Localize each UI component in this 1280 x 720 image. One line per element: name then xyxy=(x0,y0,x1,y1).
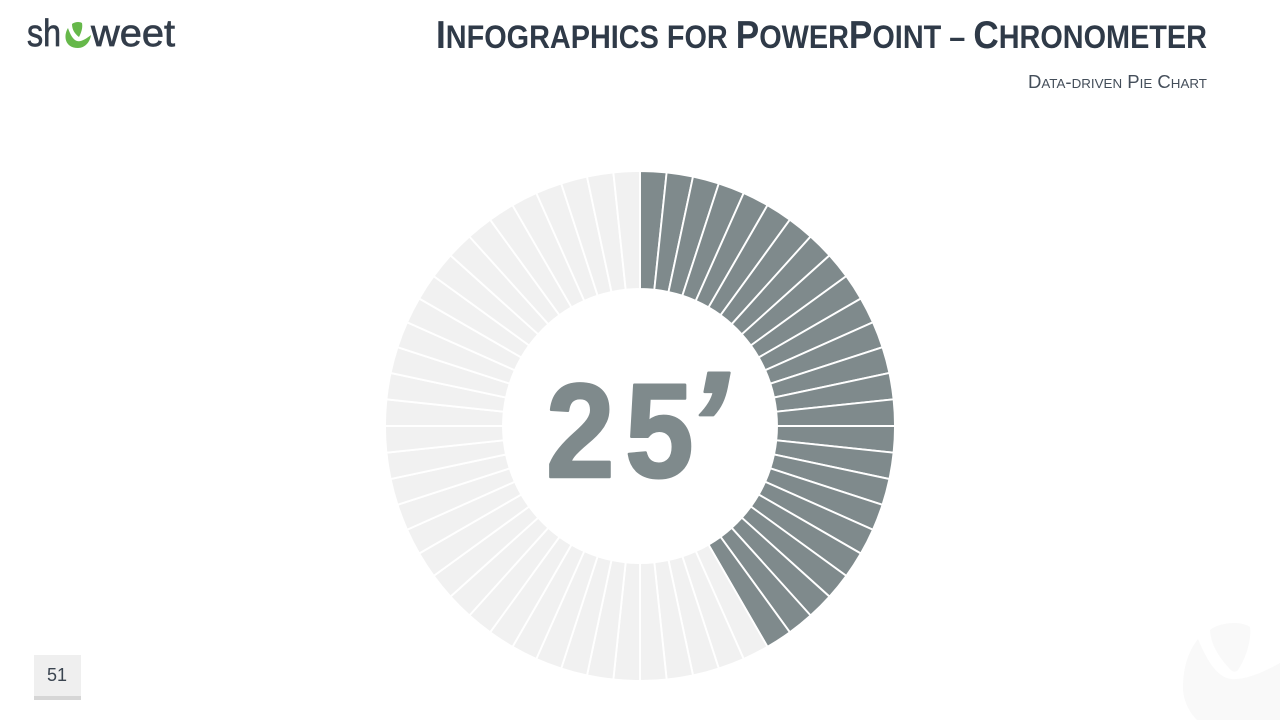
page number: 51 xyxy=(47,665,67,685)
logo xyxy=(27,13,175,55)
icon: logo mark xyxy=(65,22,91,48)
subtitle: Data-driven Pie Chart xyxy=(1028,72,1207,92)
center value: 25 minutes: 5 xyxy=(625,356,694,506)
logo text: sh: sh xyxy=(27,13,61,55)
center value: 25 minutes xyxy=(546,340,730,508)
remaining segments: 35 minutes xyxy=(384,170,768,682)
center value: 25 minutes: ’ xyxy=(686,340,730,508)
logo text: weet: weet xyxy=(90,13,175,55)
elapsed segments: 25 minutes xyxy=(640,171,896,648)
chart: chronometer donut xyxy=(384,170,896,682)
icon: watermark logo xyxy=(1183,623,1280,720)
center value: 25 minutes: 2 xyxy=(546,356,615,506)
page number box xyxy=(34,655,81,700)
title: INFOGRAPHICS FOR POWERPOINT – CHRONOMETER xyxy=(436,14,1207,57)
